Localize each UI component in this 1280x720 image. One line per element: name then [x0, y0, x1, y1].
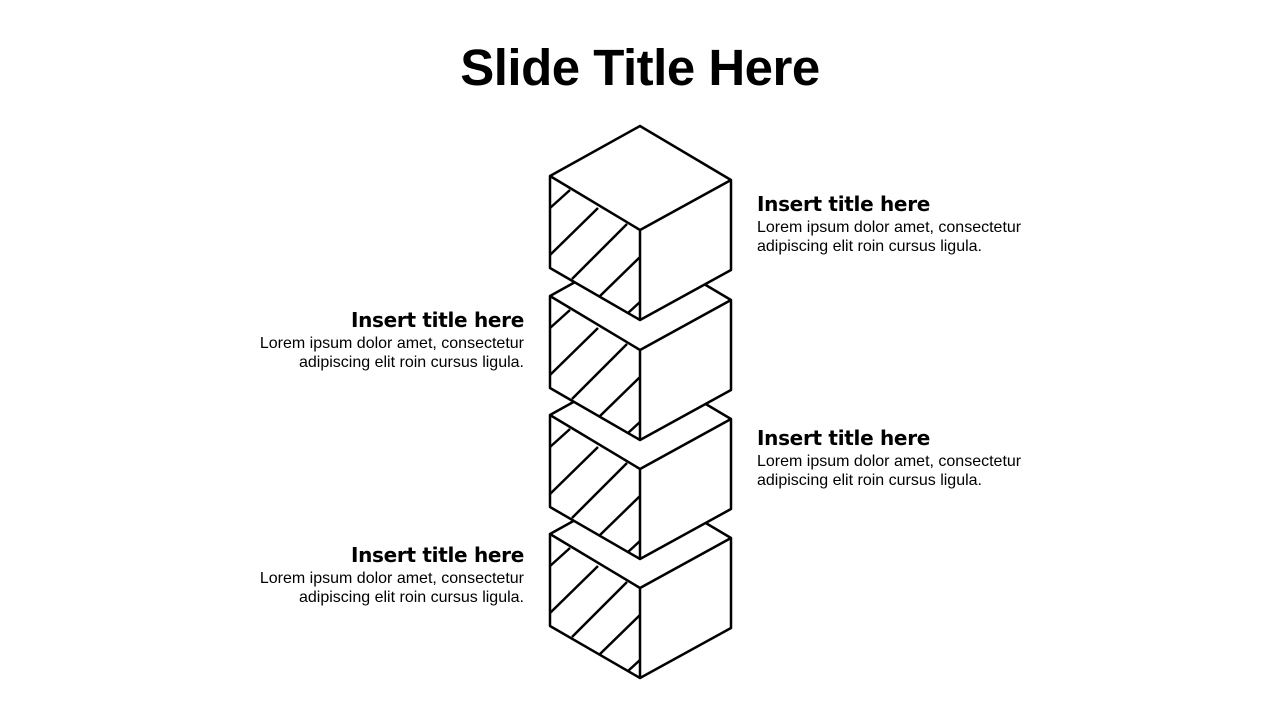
cube 2: [550, 246, 731, 440]
label 1: Insert title here: [757, 192, 930, 216]
label 3: adipiscing elit roin cursus ligula.: [757, 472, 982, 489]
label 1: Lorem ipsum dolor amet, consectetur: [757, 219, 1021, 236]
label 3: Insert title here: [757, 426, 930, 450]
label 2: [260, 308, 524, 371]
title: Slide Title Here: [460, 39, 820, 96]
label 3: Lorem ipsum dolor amet, consectetur: [757, 453, 1021, 470]
label 4: Insert title here: [351, 543, 524, 567]
cube 1: [550, 126, 731, 320]
cube 4: [550, 484, 731, 678]
label 2: Lorem ipsum dolor amet, consectetur: [260, 335, 524, 352]
label 2: adipiscing elit roin cursus ligula.: [299, 354, 524, 371]
label 1: [757, 192, 1021, 255]
label 4: adipiscing elit roin cursus ligula.: [299, 589, 524, 606]
label 2: Insert title here: [351, 308, 524, 332]
label 4: [260, 543, 524, 606]
label 4: Lorem ipsum dolor amet, consectetur: [260, 570, 524, 587]
label 1: adipiscing elit roin cursus ligula.: [757, 238, 982, 255]
label 3: [757, 426, 1021, 489]
cube 3: [550, 365, 731, 559]
